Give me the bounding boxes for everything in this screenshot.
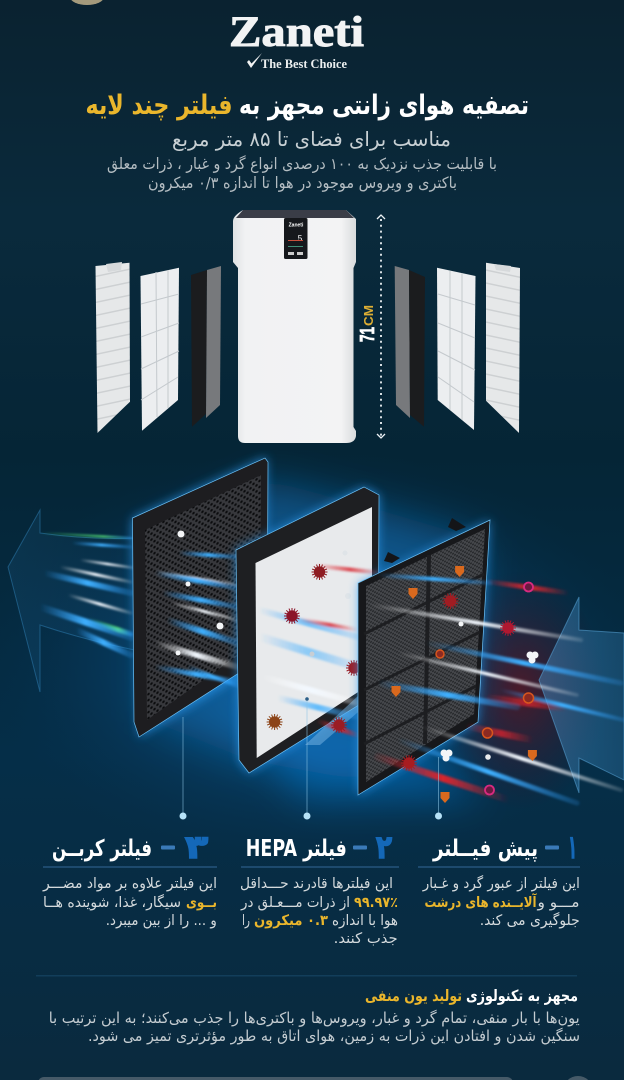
negative ion section: سنگین شدن و افتادن این ذرات به زمین، هوای اتاق به طور مؤثرتری تمیز می شود. bbox=[88, 1027, 580, 1045]
right flow arrow bbox=[435, 570, 624, 810]
logo: The Best Choice bbox=[261, 57, 347, 71]
hepa filter bbox=[236, 487, 379, 773]
height label 71 CM: CM bbox=[361, 305, 376, 326]
intro text bbox=[107, 155, 497, 193]
column 1: pre filter: این فیلتر از عبور گرد و غـبار bbox=[422, 875, 580, 892]
carbon filter particles bbox=[176, 530, 224, 656]
column 2: hepa filter: از ذرات مـــعـلق در bbox=[240, 895, 350, 911]
carbon filter bbox=[132, 457, 268, 737]
negative ion section: یون‌ها با بار منفی، تمام گرد و غبار، ویروس‌ها و باکتری‌ها را جذب می‌کنند؛ به این ترتیب با bbox=[49, 1009, 580, 1027]
control panel: Zaneti bbox=[289, 222, 304, 228]
subtitle: مناسب برای فضای تا ۸۵ متر مربع bbox=[172, 127, 451, 151]
air streaks through carbon filter bbox=[155, 553, 238, 686]
column 2: hepa filter: را bbox=[242, 913, 250, 929]
column 1: pre filter bbox=[418, 828, 580, 929]
column 3: carbon filter: این فیلتر علاوه بر مواد مضـــر bbox=[42, 876, 217, 892]
column 3: carbon filter: فیلتر کربــن bbox=[52, 836, 152, 862]
column 2: hepa filter: جذب کنند. bbox=[334, 931, 398, 947]
logo bbox=[229, 9, 364, 71]
column 3: carbon filter: بــوی bbox=[186, 895, 217, 911]
column 1: pre filter: جلوگیری می کند. bbox=[480, 912, 580, 929]
negative ion section bbox=[49, 987, 580, 1045]
column 2: hepa filter: هوا با اندازه bbox=[332, 913, 398, 929]
leader lines with dots bbox=[180, 697, 442, 820]
incoming air streaks right bbox=[370, 575, 624, 803]
filter glow bbox=[150, 480, 480, 800]
logo: Zaneti bbox=[229, 9, 364, 56]
intro text: با قابلیت جذب نزدیک به ۱۰۰ درصدی انواع گرد و غبار ، ذرات معلق bbox=[107, 155, 497, 174]
left flow arrow bbox=[8, 510, 135, 692]
column 1: pre filter: پیش فیــلتر bbox=[432, 836, 538, 862]
right exploded filters bbox=[395, 263, 520, 433]
pre filter bbox=[358, 518, 490, 795]
hepa filter air streaks bbox=[259, 566, 382, 736]
hepa filter particles bbox=[267, 550, 362, 733]
column 3: carbon filter: و ... را از بین میبرد. bbox=[106, 913, 217, 929]
column 1: pre filter: آلایــنده های درشت bbox=[424, 893, 537, 911]
title: فیلتر چند لایه bbox=[86, 90, 232, 121]
negative ion section: تولید یون منفی bbox=[365, 987, 462, 1005]
column 1: pre filter: مـــو و bbox=[536, 895, 580, 911]
decorative coin at top bbox=[70, 0, 104, 5]
column 3: carbon filter: ۳ bbox=[185, 828, 209, 866]
title bbox=[86, 90, 529, 121]
column 2: hepa filter: این فیلترها قادرند حـــداقل bbox=[240, 876, 393, 892]
height label 71 CM: 71 bbox=[357, 327, 379, 342]
column 2: hepa filter: ۰.۳ میکرون bbox=[254, 913, 328, 929]
air purifier device bbox=[233, 210, 356, 443]
height label 71 CM bbox=[357, 305, 379, 342]
column 3: carbon filter: سیگار، غذا، شوینده هــا bbox=[43, 894, 181, 911]
column 1: pre filter: ۱ bbox=[568, 828, 576, 866]
divider bbox=[36, 975, 577, 976]
control panel: 5 bbox=[298, 234, 303, 243]
height dimension arrow bbox=[377, 215, 385, 438]
column 2: hepa filter: ۲ bbox=[376, 828, 392, 866]
column 3: carbon filter bbox=[42, 828, 217, 929]
negative ion section: مجهز به تکنولوژی bbox=[466, 987, 578, 1005]
left exploded filters bbox=[96, 262, 221, 433]
column 2: hepa filter: ۹۹.۹۷٪ bbox=[354, 895, 398, 911]
title: تصفیه هوای زانتی مجهز به bbox=[239, 90, 529, 121]
intro text: باکتری و ویروس موجود در هوا تا اندازه ۰/۳ میکرون bbox=[148, 174, 457, 193]
pre filter particles bbox=[392, 566, 538, 803]
column 2: hepa filter bbox=[240, 828, 399, 947]
column 2: hepa filter: فیلتر HEPA bbox=[246, 836, 347, 862]
control panel bbox=[284, 218, 308, 259]
exhaust air streaks left bbox=[40, 533, 135, 655]
bottom cropped elements bbox=[38, 1076, 593, 1080]
